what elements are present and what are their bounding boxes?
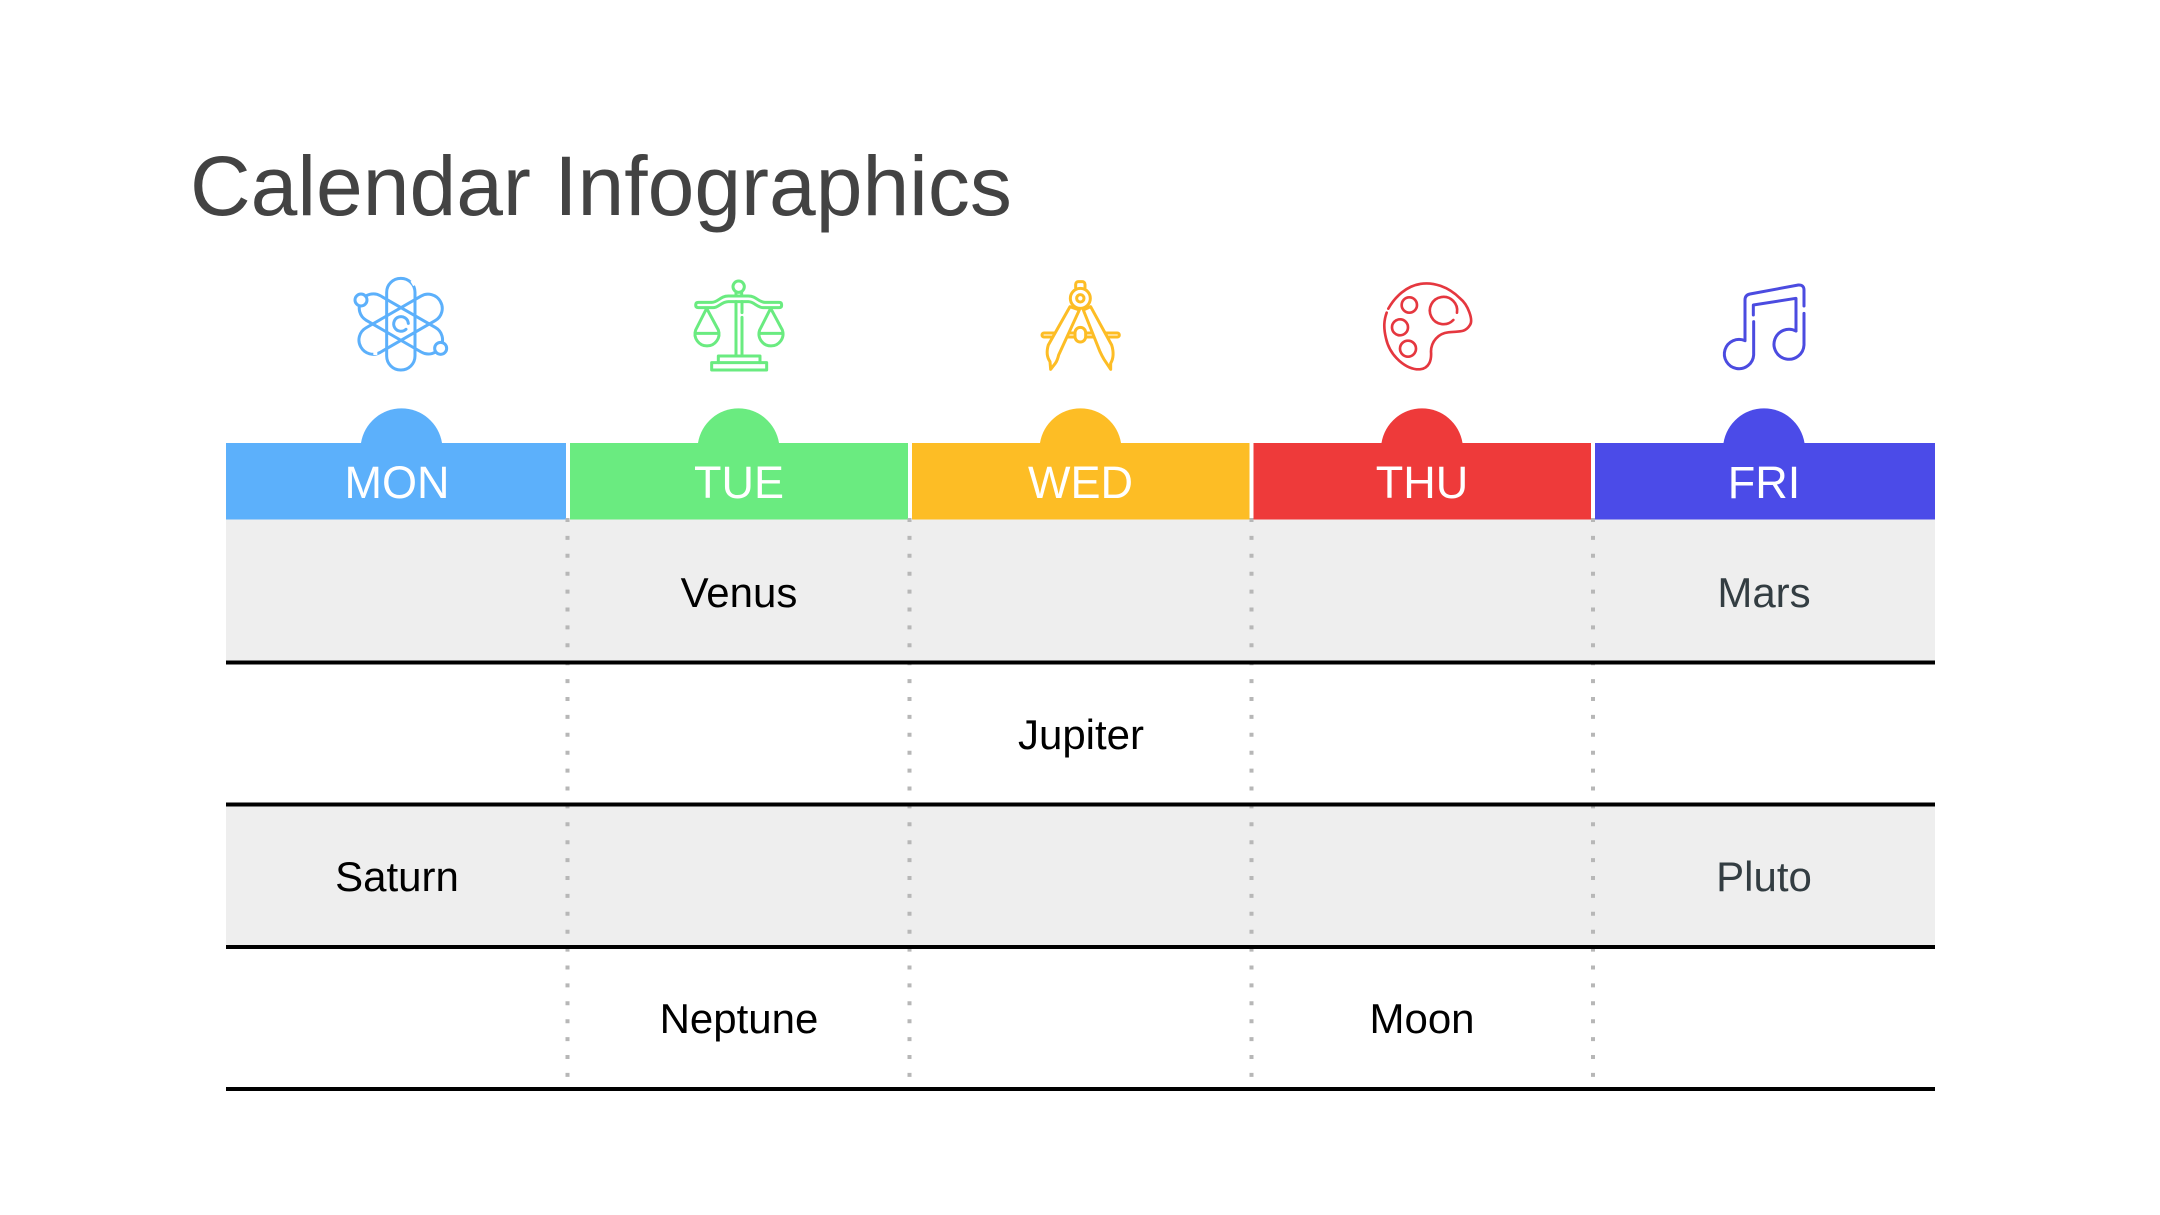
header: THU: THU — [1376, 457, 1468, 508]
label: Saturn: Saturn — [335, 853, 459, 900]
header: TUE: TUE — [694, 457, 784, 508]
header: TUE — [570, 408, 908, 520]
header: MON: MON — [344, 457, 450, 508]
header: THU — [1254, 408, 1591, 520]
header: MON — [226, 408, 566, 520]
title: Calendar Infographics — [190, 139, 1012, 233]
label: Pluto: Pluto — [1716, 853, 1812, 900]
icon: music notes — [1724, 285, 1804, 369]
calendar rows — [226, 518, 1935, 1091]
label: Venus: Venus — [681, 569, 797, 616]
label: Moon: Moon — [1369, 995, 1475, 1042]
header: WED: WED — [1028, 457, 1133, 508]
header: FRI: FRI — [1728, 457, 1800, 508]
label: Neptune: Neptune — [660, 995, 818, 1042]
icon: atom — [354, 278, 448, 370]
label: Mars: Mars — [1717, 569, 1811, 616]
header: FRI — [1595, 408, 1935, 520]
icon: balance scales — [695, 281, 783, 370]
label: Jupiter: Jupiter — [1018, 711, 1144, 758]
header: WED — [912, 408, 1250, 520]
icon: drawing compass — [1042, 282, 1119, 369]
icon: paint palette — [1384, 283, 1471, 369]
